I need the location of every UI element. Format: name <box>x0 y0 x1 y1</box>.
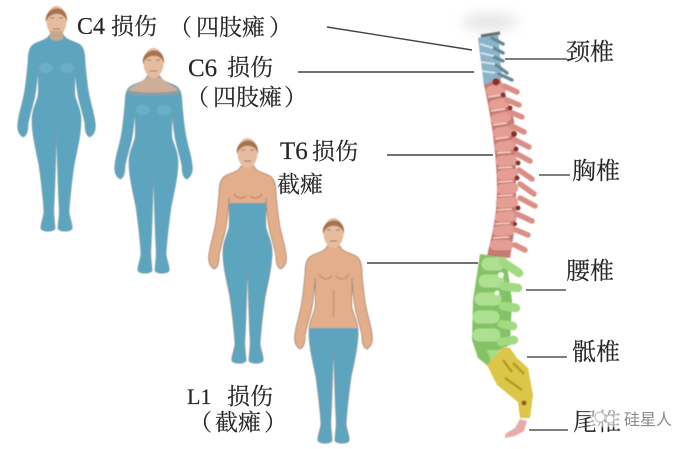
thoracic vertebrae <box>484 78 535 258</box>
watermark: 硅星人 <box>624 411 672 429</box>
skull base shadow <box>462 13 518 31</box>
coccyx <box>505 419 527 438</box>
label: cervical: 颈椎 <box>566 39 614 66</box>
cervical vertebrae <box>478 32 512 86</box>
label: L1 injury: （截瘫） <box>189 410 287 435</box>
watermark <box>590 408 674 429</box>
leader lines from spine to region labels <box>505 59 570 430</box>
label: C6 injury <box>186 55 307 110</box>
label: L1 injury <box>187 384 287 435</box>
figure: T6 injury body <box>209 138 286 363</box>
lumbar vertebrae <box>472 254 519 366</box>
label: T6 injury: 损伤 <box>312 139 358 164</box>
figure: C4 injury body <box>18 6 95 231</box>
label: C4 injury: C4 <box>77 14 105 40</box>
figure: C6 injury body <box>115 48 192 273</box>
leader lines from injury levels to spine <box>298 27 493 263</box>
label: C6 injury: C6 <box>188 55 217 82</box>
sacrum <box>487 347 533 418</box>
label: sacral: 骶椎 <box>572 339 620 366</box>
label: L1 injury: L1 <box>187 384 211 409</box>
label: T6 injury: 截瘫 <box>277 172 323 197</box>
label: lumbar: 腰椎 <box>566 258 614 285</box>
label: C4 injury <box>77 14 292 40</box>
vertebral bodies <box>491 89 513 245</box>
figure: L1 injury body <box>295 218 372 443</box>
label: T6 injury <box>277 138 358 197</box>
spine illustration <box>462 13 535 438</box>
label: thoracic: 胸椎 <box>572 158 620 185</box>
label: T6 injury: T6 <box>280 138 308 165</box>
label: C6 injury: 损伤 <box>227 55 273 80</box>
label: C4 injury: 损伤 <box>111 14 157 39</box>
label: L1 injury: 损伤 <box>227 384 273 409</box>
label: C6 injury: （四肢瘫） <box>186 85 307 110</box>
spinous processes <box>504 86 535 250</box>
label: C4 injury: （四肢瘫） <box>169 15 292 40</box>
label: coccygeal: 尾椎 <box>573 409 621 436</box>
